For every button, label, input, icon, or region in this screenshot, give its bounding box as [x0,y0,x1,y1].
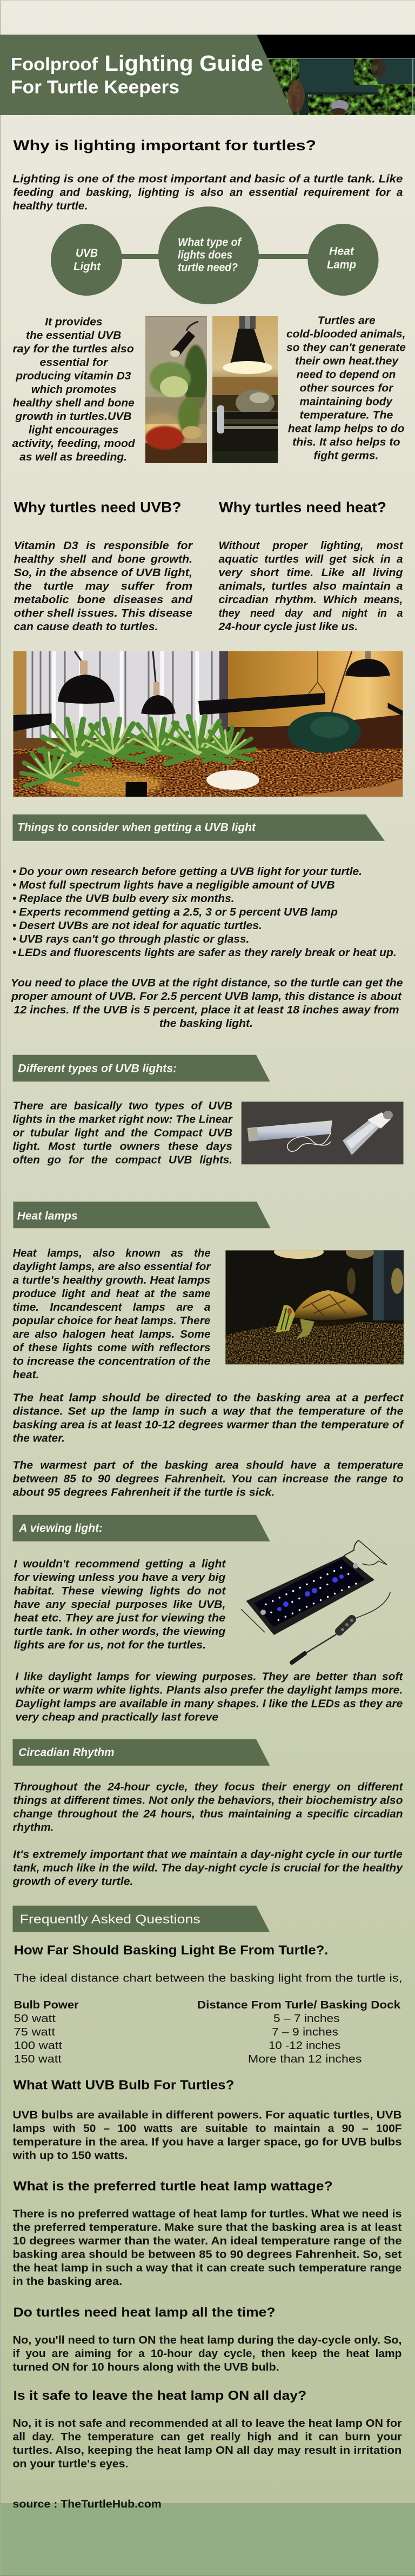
text: why heat: they need day and night in a [218,608,403,619]
text: UVB light description: as well as breeding. [19,451,127,463]
text: day-night cycle: tank, much like in the wild. The day-night cycle is crucial for the healthy [13,1862,403,1874]
text: UVB distance [11,977,403,1030]
text: heat lamps: are also halogen heat lamps. Some [13,1329,211,1340]
UVB bullet list: • [12,893,16,905]
banner: frequently asked questions: Frequently Asked Questions [20,1912,200,1926]
photo: turtle habitat with hanging lamps [13,651,403,797]
text: types of UVB: lights in the market right now: The Linear [13,1114,233,1126]
text: heat lamp placement: distance. Set up the lamp in such a way that the temperature of the [13,1405,403,1417]
FAQ: how far: How Far Should Basking Light Be From Turtle?. [14,1943,328,1958]
text: why heat: aquatic turtles will get sick in a [218,553,403,565]
text: why UVB: metabolic bone diseases and [14,594,193,606]
photo: heat lamp over turtle [212,316,278,463]
text: heat lamps: of these lights come with reflectors [13,1342,211,1354]
photo: LED viewing light [241,1540,390,1663]
text: viewing light: turtle tank. In other words, the viewing [14,1626,225,1638]
node: UVB light: Light [73,261,101,273]
text: daylight lamps: Daylight lamps are available in many shapes. I like the LEDs as they are [15,1698,403,1710]
text: circadian rhythm: rhythm. [13,1821,53,1833]
text: viewing light [14,1558,226,1651]
table: bulb power vs distance: 75 watt [14,2026,55,2038]
text: heat lamp description: temperature. The [299,409,393,421]
source credit: source : TheTurtleHub.com [13,2498,162,2510]
heading: why turtles need heat: Why turtles need heat? [219,499,386,515]
text: daylight lamps: I like daylight lamps for viewing purposes. They are better than soft [15,1671,404,1683]
title [11,51,263,98]
answer: what watt: with up to 150 watts. [12,2150,128,2161]
text: circadian rhythm [13,1781,404,1833]
title: Foolproof [11,54,98,74]
text: viewing light: lights are for us, not for the turtles. [14,1639,206,1651]
text: circadian rhythm: Throughout the 24-hour cycle, they focus their energy on different [13,1781,404,1793]
text: types of UVB [13,1100,233,1166]
banner: heat lamps [13,1202,270,1228]
text: why UVB: can cause death to turtles. [14,621,158,633]
text: heat lamps: Heat lamps, also known as the [13,1247,211,1259]
text: warmest part: about 95 degrees Fahrenheit if the turtle is sick. [13,1486,275,1498]
UVB bullet list: Desert UVBs are not ideal for aquatic turtles. [19,920,262,932]
answer: what watt [12,2109,401,2161]
text: UVB distance: the basking light. [159,1018,253,1030]
text: why heat: circadian rhythm. Which means, [218,594,403,606]
node: what type of lights: turtle need? [178,262,238,274]
node: what type of lights [158,206,259,304]
text: heat lamps: daylight lamps, are also essential for [13,1261,211,1273]
table: bulb power vs distance: Distance From Turle/ Basking Dock [197,1999,401,2011]
heading: why is lighting important: Why is lighting important for turtles? [13,137,316,154]
text: heat lamp description: fight germs. [313,450,378,462]
text: heat lamp description [286,315,406,462]
answer: preferred wattage: basking area should be between 85 to 90 degrees Fahrenheit. So, set [13,2249,402,2261]
text: heat lamp description: need to depend on [297,369,396,381]
node: heat lamp: Lamp [327,259,356,271]
photo: turtle basking on gravel [225,1245,404,1365]
text: heat lamps: a turtle's healthy growth. Heat lamps [13,1274,211,1286]
header banner [0,35,415,115]
text: why UVB [14,540,193,633]
answer: what watt: UVB bulbs are available in different powers. For aquatic turtles, UVB [13,2109,401,2121]
table: bulb power vs distance: Bulb Power [14,1999,79,2011]
answer: safe all day: No, it is not safe and recommended at all to leave the heat lamp ON for [13,2418,402,2430]
answer: what watt: temperature in the area. If you have a larger space, go for UVB bulbs [13,2136,402,2148]
text: why heat: 24-hour cycle just like us. [218,621,358,633]
text: heat lamp description: Turtles are [318,315,376,326]
UVB bullet list: • [12,866,16,878]
banner: circadian rhythm: Circadian Rhythm [18,1746,115,1759]
FAQ: safe all day: Is it safe to leave the heat lamp ON all day? [13,2388,306,2403]
header green shape [0,35,293,115]
banner: frequently asked questions [13,1906,270,1932]
text: heat lamps: popular choice for heat lamps. There [12,1315,211,1327]
intro paragraph: feeding and basking, lighting is also an essential requirement for a [13,187,403,199]
text: heat lamp placement: basking area is at least 10-12 degrees warmer than the temperature of [13,1419,405,1431]
text: circadian rhythm: things at different times. Not only the behaviors, their biochemistry also [13,1794,403,1806]
banner: heat lamps: Heat lamps [17,1210,77,1223]
FAQ: all the time: Do turtles need heat lamp all the time? [13,2305,276,2320]
text: heat lamps: time. Incandescent lamps are a [13,1302,211,1313]
photo: UVB lamp over tank [144,316,208,463]
text: why UVB: healthy shell and bone growth. [14,553,192,565]
text: why UVB: So, in the absence of UVB light, [14,567,192,579]
text: why UVB: the turtle may suffer from [14,580,192,592]
UVB bullet list: LEDs and fluorescents lights are safer as they rarely break or heat up. [18,947,397,959]
answer: safe all day [13,2418,402,2470]
text: UVB light description: which promotes [31,384,116,396]
text: UVB light description: the essential UVB [26,330,121,342]
UVB bullet list: Experts recommend getting a 2.5, 3 or 5 percent UVB lamp [19,906,338,918]
text: heat lamp description: maintaining body [299,396,393,408]
answer: all the time: turned ON for 10 hours along with the UVB bulb. [13,2361,279,2373]
text: why heat: very short time. Like all living [218,567,403,579]
UVB bullet list: • [12,920,16,932]
node: UVB light [51,224,122,296]
text: why heat [218,540,404,633]
text: types of UVB: There are basically two types of UVB [13,1100,232,1112]
text: heat lamp placement: the water. [13,1432,65,1444]
node: heat lamp: Heat [329,245,354,258]
diagram: types of lights [51,206,378,304]
text: viewing light: have any special purposes like UVB, [14,1599,225,1611]
text: UVB light description: It provides [45,316,103,328]
text: heat lamp description: so they can't generate [286,342,406,353]
banner: things to consider: Things to consider when getting a UVB light [17,822,256,834]
text: day-night cycle: growth of every turtle. [12,1876,133,1887]
node: UVB light: UVB [76,247,98,259]
answer: all the time [13,2334,402,2373]
intro paragraph: Lighting is one of the most important and basic of a turtle tank. Like [13,173,403,185]
text: heat lamps: produce light and heat at the same [12,1288,210,1300]
text: warmest part: The warmest part of the basking area should have a temperature [13,1459,403,1471]
text: heat lamp description: other sources for [299,382,394,394]
answer: preferred wattage: in the basking area. [13,2276,122,2288]
banner: different types of UVB lights: Different types of UVB lights: [18,1062,177,1075]
text: UVB light description [12,316,136,463]
title: For Turtle Keepers [11,77,179,98]
text: daylight lamps [15,1671,404,1723]
text: viewing light: I wouldn't recommend getting a light [14,1558,226,1570]
text: day-night cycle: It's extremely important that we maintain a day-night cycle in our turtle [13,1848,403,1860]
text: viewing light: habitat. These viewing lights do not [14,1585,226,1597]
text: UVB light description: ray for the turtles also [13,343,134,355]
banner: circadian rhythm [13,1739,270,1766]
banner: a viewing light: A viewing light: [18,1522,103,1534]
text: viewing light: for viewing unless you have a very big [14,1572,225,1584]
UVB bullet list: • [12,933,16,945]
UVB bullet list: Do your own research before getting a UVB light for your turtle. [19,866,362,878]
text: heat lamp description: their own heat.they [295,355,399,367]
header photo: turtle aquarium [257,35,415,115]
text: daylight lamps: very cheap and practically last foreve [15,1711,218,1723]
text: heat lamps: to increase the concentration of the [13,1356,211,1367]
text: heat lamps [12,1247,211,1381]
intro paragraph: healthy turtle. [13,200,88,212]
table: bulb power vs distance: More than 12 inches [248,2053,362,2065]
text: types of UVB: light. Most turtle owners these days [13,1141,232,1153]
answer: what watt: lamps with 50 – 100 watts are suitable to maintain a 90 – 100F [13,2123,402,2134]
heading: why turtles need UVB: Why turtles need UVB? [14,499,182,515]
text: UVB light description: healthy shell and bone [13,397,135,409]
table: bulb power vs distance: 7 – 9 inches [272,2026,338,2038]
node: what type of lights: lights does [178,249,232,262]
UVB bullet list: • [12,906,16,918]
text: UVB light description: growth in turtles.UVB [15,411,131,423]
answer: preferred wattage [13,2208,402,2288]
text: warmest part [13,1459,403,1498]
answer: preferred wattage: There is no preferred wattage of heat lamp for turtles. What we need is [13,2208,402,2220]
UVB bullet list: • [12,947,16,959]
banner: different types of UVB lights [13,1055,270,1082]
FAQ: what watt: What Watt UVB Bulb For Turtles? [13,2078,235,2093]
table: bulb power vs distance: 50 watt [14,2013,56,2025]
table: bulb power vs distance: 150 watt [14,2053,62,2065]
text: UVB distance: You need to place the UVB at the right distance, so the turtle can get the [11,977,403,989]
table: bulb power vs distance [14,1999,401,2065]
answer: all the time: No, you'll need to turn ON the heat lamp during the day-cycle only. So, [13,2334,402,2346]
text: heat lamp description: cold-blooded animals, [286,328,405,340]
banner: things to consider [13,815,385,841]
text: heat lamp description: this. It also helps to [292,436,400,448]
banner: a viewing light [13,1515,270,1541]
connectors [121,254,309,259]
text: heat lamp placement [13,1392,405,1444]
intro paragraph [13,173,403,212]
answer: preferred wattage: the heat lamp in such a way that it can create such temperature range [13,2263,402,2274]
text: heat lamp description: heat lamp helps to do [288,423,404,435]
text: UVB distance: proper amount of UVB. For 2.5 percent UVB lamp, this distance is about [11,991,402,1003]
UVB bullet list: Replace the UVB bulb every six months. [19,893,235,905]
text: warmest part: between 85 to 90 degrees Fahrenheit. You can increase the range to [13,1473,403,1485]
answer: safe all day: turtles. Also, keeping the heat lamp ON all day may result in irritation [13,2445,402,2457]
text: distance chart intro: The ideal distance chart between the basking light from the turtle is, [14,1973,402,1985]
text: viewing light: heat etc. They are just for viewing the [14,1612,225,1624]
plants [39,719,114,766]
text: why heat: animals, turtles also maintain a [218,580,403,592]
text: types of UVB: or tubular light and the Compact UVB [13,1127,232,1139]
table: bulb power vs distance: 5 – 7 inches [273,2013,339,2025]
text: day-night cycle [12,1848,403,1887]
text: UVB light description: producing vitamin D3 [15,370,131,382]
answer: preferred wattage: the preferred temperature. Make sure that the basking area is at least [13,2222,402,2234]
FAQ: preferred wattage: What is the preferred turtle heat lamp wattage? [13,2179,333,2194]
text: UVB light description: essential for [40,357,109,369]
text: heat lamps: heat. [13,1369,39,1381]
answer: safe all day: on your turtle's eyes. [13,2458,128,2470]
UVB bullet list: Most full spectrum lights have a negligible amount of UVB [19,879,335,891]
UVB bullet list [12,866,397,959]
text: daylight lamps: white or warm white lights. Plants also prefer the daylight lamps more. [15,1684,403,1696]
UVB bullet list: UVB rays can't go through plastic or glass. [19,933,249,945]
text: why heat: Without proper lighting, most [218,540,404,552]
table: bulb power vs distance: 100 watt [14,2040,63,2052]
text: UVB light description: light encourages [29,424,118,436]
text: circadian rhythm: change throughout the 24 hours, thus maintaining a specific circadian [13,1808,403,1820]
lamps [13,651,403,731]
text: heat lamp placement: The heat lamp should be directed to the basking area at a perfect [13,1392,404,1404]
node: what type of lights: What type of [178,236,242,249]
title: Lighting Guide [105,51,263,76]
text: why UVB: other shell issues. This disease [14,608,192,619]
UVB bullet list: • [12,879,16,891]
text: types of UVB: often go for the compact UVB lights. [13,1154,232,1166]
text: UVB light description: activity, feeding, mood [12,438,136,450]
answer: preferred wattage: 10 degrees warmer than the water. An ideal temperature range of the [13,2235,402,2247]
node: heat lamp [308,224,378,296]
answer: safe all day: all day. The temperature can get really high and it can burn your [13,2431,402,2443]
text: why UVB: Vitamin D3 is responsible for [14,540,193,552]
table: bulb power vs distance: 10 -12 inches [269,2040,340,2052]
text: UVB distance: 12 inches. If the UVB is 5 percent, place it at least 18 inches away from [14,1004,399,1016]
photo: tube and compact UVB lamps [242,1102,403,1164]
answer: all the time: if you are aiming for a 10-hour day cycle, then keep the heat lamp [13,2348,402,2360]
